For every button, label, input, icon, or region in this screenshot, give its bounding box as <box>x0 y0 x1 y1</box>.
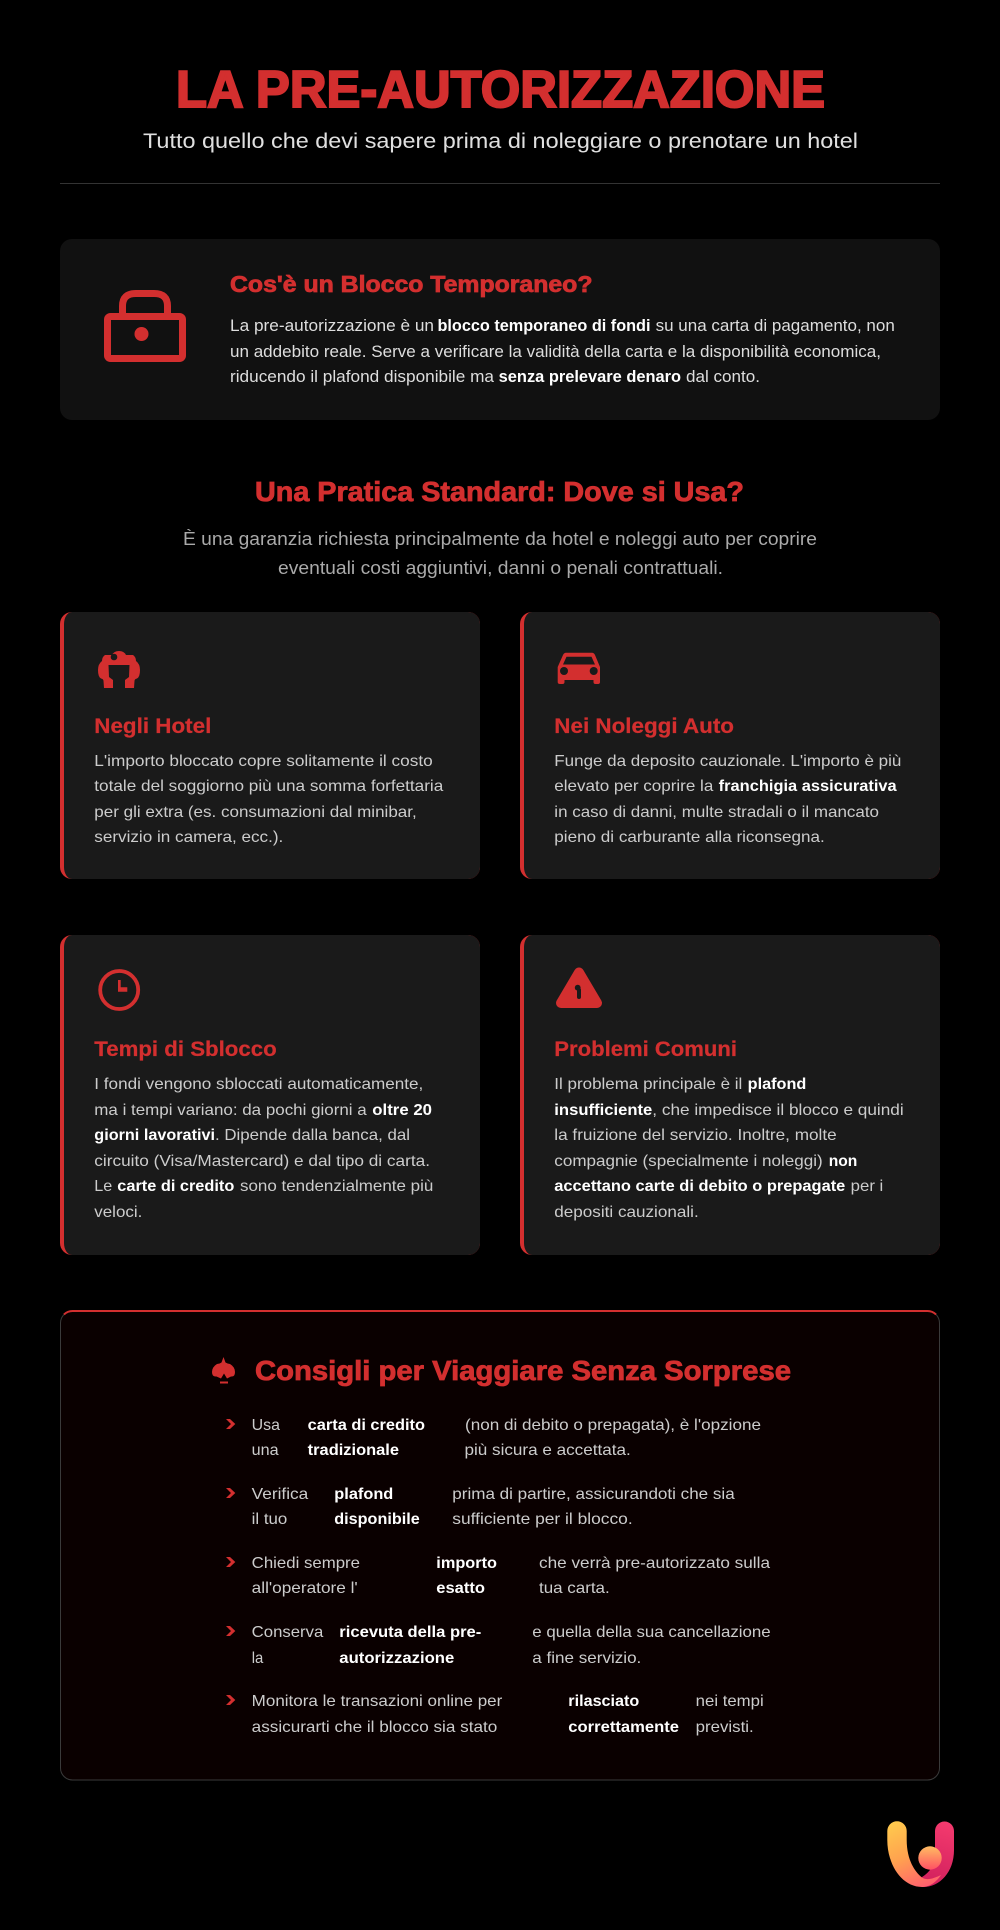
text: release times: Le <box>94 1178 113 1195</box>
text: common problems: depositi cauzionali. <box>554 1204 699 1221</box>
tip 5 <box>226 1693 764 1736</box>
text: car rentals: franchigia assicurativa <box>719 778 897 795</box>
text: common problems: insufficiente <box>554 1102 653 1119</box>
tip 2: Verifica <box>252 1486 309 1503</box>
tip 2: il tuo <box>252 1511 288 1528</box>
text: common problems: la fruizione del servizio. Inoltre, molte <box>554 1127 837 1144</box>
tip 5: assicurarti che il blocco sia stato <box>252 1719 498 1736</box>
tip 3: Chiedi sempre <box>252 1555 360 1572</box>
tip 1 <box>226 1417 761 1459</box>
tip 5: nei tempi <box>696 1693 764 1710</box>
tip 5: previsti. <box>696 1719 754 1736</box>
panel: common problems <box>520 935 940 1255</box>
tip 4: Conserva <box>252 1624 324 1641</box>
tip 5: Monitora le transazioni online per <box>252 1693 502 1710</box>
text: temporary hold description: riducendo il plafond disponibile ma <box>230 368 494 386</box>
text: hotels: totale del soggiorno più una somma forfettaria <box>94 778 444 795</box>
text: hotels: L'importo bloccato copre solitamente il costo <box>94 753 433 770</box>
text: car rentals: in caso di danni, multe stradali o il mancato <box>554 804 879 821</box>
tip 4: la <box>252 1650 264 1667</box>
tip 5: correttamente <box>568 1719 679 1736</box>
icon: light bulb <box>212 1357 235 1384</box>
icon: padlock <box>108 294 182 358</box>
text: release times: giorni lavorativi <box>94 1127 215 1144</box>
panel: travel tips <box>60 1311 940 1780</box>
panel: release times <box>60 935 480 1255</box>
text: release times: veloci. <box>94 1204 142 1221</box>
tip 2: disponibile <box>334 1511 420 1528</box>
tip 5: rilasciato <box>568 1693 640 1710</box>
text: temporary hold description: La pre-autorizzazione è un <box>230 317 434 335</box>
heading: hotels: Negli Hotel <box>94 714 211 738</box>
heading: release times: Tempi di Sblocco <box>94 1037 277 1061</box>
tip 1: più sicura e accettata. <box>464 1442 631 1459</box>
tip 2: sufficiente per il blocco. <box>452 1511 633 1528</box>
text: release times: . Dipende dalla banca, dal <box>215 1127 410 1144</box>
tip 1: Usa <box>252 1417 280 1434</box>
text: release times: ma i tempi variano: da pochi giorni a <box>94 1102 367 1119</box>
text: car rentals: elevato per coprire la <box>554 778 714 795</box>
icon: hotel <box>98 651 140 688</box>
tip 3: all'operatore l' <box>252 1580 358 1597</box>
text: car rentals <box>554 753 901 846</box>
heading: common problems: Problemi Comuni <box>554 1037 737 1061</box>
text: release times: oltre 20 <box>372 1102 432 1119</box>
subtitle: Tutto quello che devi sapere prima di noleggiare o prenotare un hotel <box>143 130 858 153</box>
text: hotels <box>94 753 444 846</box>
text: car rentals: Funge da deposito cauzionale. L'importo è più <box>554 753 901 770</box>
panel: temporary hold <box>60 239 940 420</box>
tip 2: prima di partire, assicurandoti che sia <box>452 1486 735 1503</box>
icon: warning <box>561 972 597 1003</box>
tip 4: autorizzazione <box>339 1650 455 1667</box>
tip 3: che verrà pre-autorizzato sulla <box>539 1555 770 1572</box>
tip 1: (non di debito o prepagata), è l'opzione <box>465 1417 761 1434</box>
tip 3: tua carta. <box>539 1580 610 1597</box>
text: common problems: plafond <box>748 1076 806 1093</box>
heading: where it is used: Una Pratica Standard: Dove si Usa? <box>255 476 744 507</box>
panel: hotels <box>60 612 480 879</box>
icon: clock <box>100 971 138 1009</box>
text: release times: circuito (Visa/Mastercard) e dal tipo di carta. <box>94 1153 430 1170</box>
text: common problems <box>554 1076 904 1221</box>
tip 4: ricevuta della pre- <box>339 1624 481 1641</box>
tip 4: a fine servizio. <box>532 1650 641 1667</box>
text: temporary hold description: senza prelevare denaro <box>499 368 681 386</box>
tip 3: importo <box>436 1555 497 1572</box>
tip 3: esatto <box>436 1580 485 1597</box>
text: common problems: per i <box>851 1178 883 1195</box>
text: temporary hold description: su una carta di pagamento, non <box>656 317 895 335</box>
text: common problems: Il problema principale è il <box>554 1076 742 1093</box>
text: common problems: compagnie (specialmente i noleggi) <box>554 1153 823 1170</box>
tip 3 <box>226 1555 770 1597</box>
tip 1: una <box>252 1442 279 1459</box>
text: common problems: , che impedisce il blocco e quindi <box>652 1102 904 1119</box>
text: car rentals: pieno di carburante alla riconsegna. <box>554 829 825 846</box>
text: release times: I fondi vengono sbloccati automaticamente, <box>94 1076 423 1093</box>
text: release times: carte di credito <box>117 1178 235 1195</box>
text: temporary hold description: un addebito reale. Serve a verificare la validità della carta e la disponibilità economica, <box>230 343 881 361</box>
text: section intro: eventuali costi aggiuntivi, danni o penali contrattuali. <box>278 558 723 578</box>
tip 4 <box>226 1624 771 1667</box>
heading: car rentals: Nei Noleggi Auto <box>554 714 734 738</box>
tip 1: tradizionale <box>308 1442 399 1459</box>
heading: temporary hold: Cos'è un Blocco Temporaneo? <box>230 271 592 297</box>
icon: car <box>558 653 600 684</box>
tip 4: e quella della sua cancellazione <box>532 1624 771 1641</box>
text: hotels: per gli extra (es. consumazioni dal minibar, <box>94 804 417 821</box>
text: release times <box>94 1076 433 1221</box>
panel: car rentals <box>520 612 940 879</box>
text: section intro <box>183 529 817 578</box>
text: section intro: È una garanzia richiesta principalmente da hotel e noleggi auto per coprire <box>183 529 817 549</box>
text: temporary hold description: blocco temporaneo di fondi <box>438 317 650 335</box>
text: release times: sono tendenzialmente più <box>240 1178 433 1195</box>
text: temporary hold description: dal conto. <box>686 368 760 386</box>
heading: travel tips: Consigli per Viaggiare Senza Sorprese <box>255 1355 791 1386</box>
tip 2: plafond <box>334 1486 393 1503</box>
text: temporary hold description <box>230 317 895 386</box>
title: LA PRE-AUTORIZZAZIONE <box>176 61 825 119</box>
tip 1: carta di credito <box>308 1417 425 1434</box>
tip 2 <box>226 1486 735 1528</box>
text: hotels: servizio in camera, ecc.). <box>94 829 283 846</box>
text: common problems: non <box>829 1153 857 1170</box>
text: common problems: accettano carte di debito o prepagate <box>554 1178 846 1195</box>
logo <box>887 1821 954 1887</box>
